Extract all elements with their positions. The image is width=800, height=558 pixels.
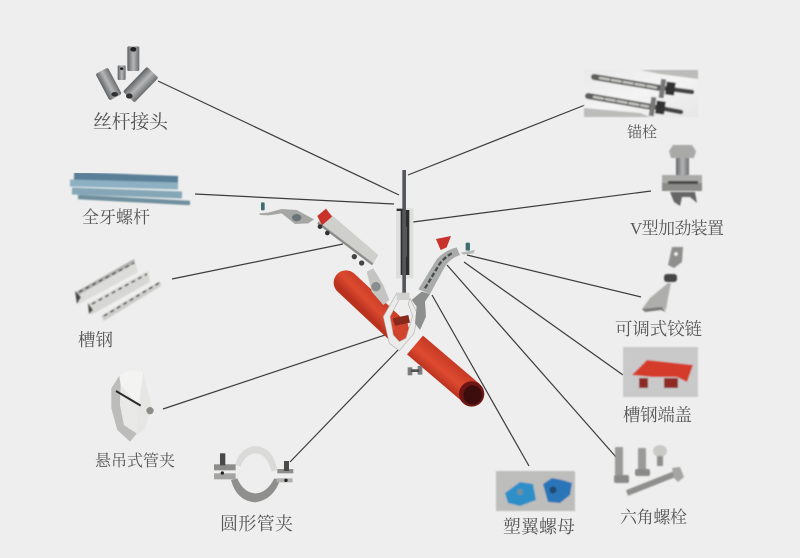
central seismic support assembly [259, 170, 484, 407]
left diagonal channel with red end cap [317, 209, 378, 266]
callout: 六角螺栓 [614, 445, 687, 527]
callout: 槽钢 [75, 259, 161, 350]
label: 槽钢端盖 [623, 405, 692, 425]
label: V型加劲装置 [630, 218, 724, 238]
callout: 可调式铰链 [615, 247, 702, 339]
label: 槽钢 [78, 330, 113, 350]
label: 塑翼螺母 [503, 517, 575, 537]
lower right brace [412, 292, 430, 330]
lower pipe segment [415, 345, 484, 407]
label: 丝杆接头 [93, 111, 169, 133]
left adjustable hinge [259, 202, 314, 224]
label: 悬吊式管夹 [95, 452, 175, 470]
callout: 悬吊式管夹 [95, 370, 175, 470]
icon: clevis hanger [111, 370, 154, 442]
label: 六角螺栓 [620, 508, 687, 527]
icon: threaded rod couplers [95, 46, 158, 103]
label: 全牙螺杆 [82, 208, 150, 227]
icon: hex bolts [614, 445, 684, 493]
label: 可调式铰链 [615, 319, 702, 339]
left lower brace [367, 268, 389, 305]
upper pipe segment [346, 283, 397, 330]
callout: V型加劲装置 [630, 145, 724, 238]
icon: threaded rods [70, 176, 190, 203]
icon: anchor bolts [584, 70, 698, 117]
right hinge fitting [461, 243, 475, 255]
callout: 槽钢端盖 [623, 347, 698, 425]
icon: channel end cap [623, 347, 698, 397]
callout: 圆形管夹 [214, 446, 293, 534]
icon: round pipe clamp [214, 446, 293, 502]
icon: V-type stiffener [662, 145, 702, 206]
leader lines [158, 81, 651, 466]
label: 锚栓 [627, 124, 657, 141]
callout: 全牙螺杆 [70, 176, 190, 227]
callout: 塑翼螺母 [496, 471, 575, 537]
pipe clamp around pipe [383, 293, 418, 351]
callout: 丝杆接头 [93, 46, 169, 133]
icon: plastic wing nuts [496, 471, 575, 511]
callout: 锚栓 [584, 70, 698, 141]
right curved channel [418, 236, 460, 294]
icon: slotted channels [75, 259, 161, 321]
label: 圆形管夹 [220, 514, 293, 534]
bolt under pipe [408, 366, 422, 375]
icon: adjustable hinge [642, 247, 683, 312]
vertical channel and threaded rod [396, 170, 413, 293]
